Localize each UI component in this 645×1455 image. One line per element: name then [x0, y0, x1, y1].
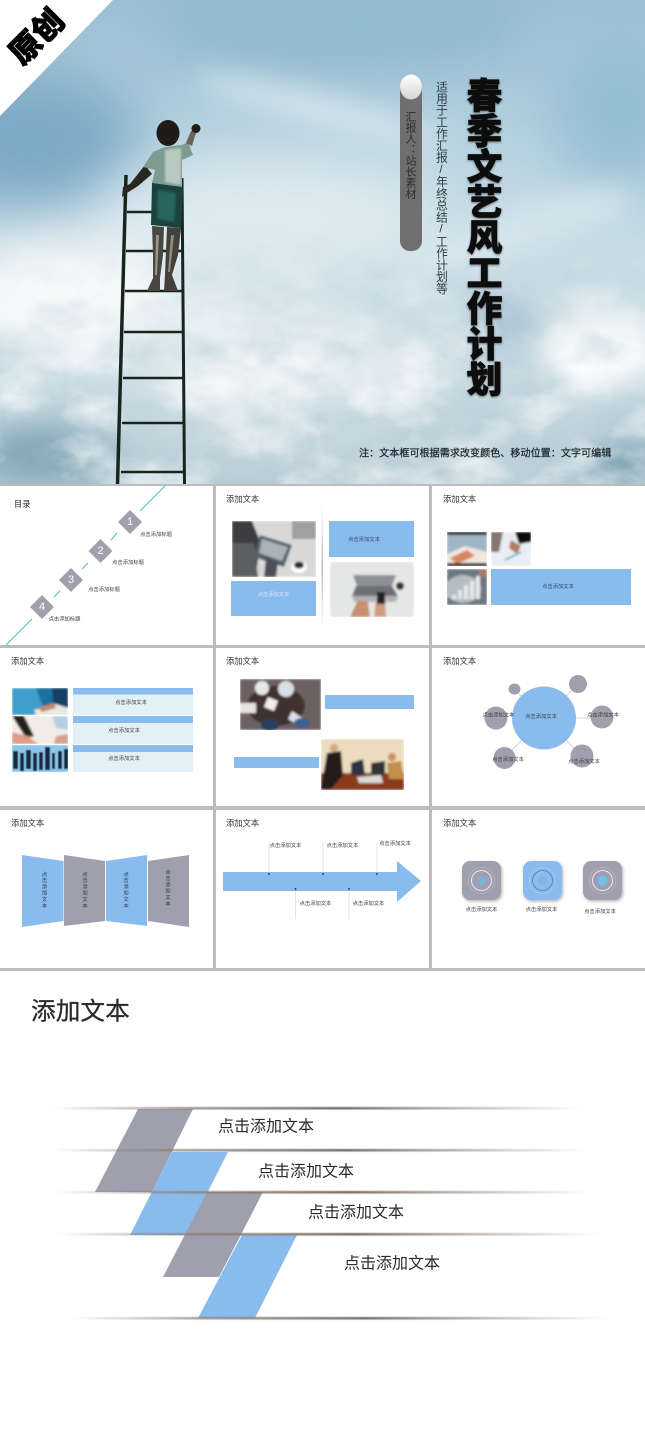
note: 注：文本框可根据需求改变颜色、移动位置：文字可编辑	[359, 446, 611, 460]
hub labels: 点击添加文本	[587, 710, 620, 718]
item 1: 点击添加标题	[140, 530, 173, 538]
photo: laptop and hands	[330, 562, 414, 617]
slide: contents	[0, 486, 213, 645]
heading: 添加文本	[226, 656, 259, 666]
rule lines	[49, 1107, 608, 1320]
ladder	[118, 175, 184, 484]
slide: photo grid	[432, 486, 645, 645]
fold 1: 点击添加文本	[40, 871, 47, 909]
photo: silhouettes	[12, 745, 68, 772]
item 1: 1	[127, 516, 133, 528]
slide: three rows	[0, 648, 213, 806]
photo: tablet on table	[232, 521, 316, 577]
item 3: 点击添加标题	[88, 585, 121, 593]
slide: two columns	[216, 486, 429, 645]
labels: 点击添加文本	[308, 1204, 404, 1222]
fold 4: 点击添加文本	[164, 869, 171, 907]
subtitle: 适用于工作汇报/年终总结/工作计划等	[434, 81, 448, 294]
item 1	[118, 510, 173, 538]
photo: hands and papers	[447, 532, 487, 566]
timeline labels: 点击添加文本	[300, 899, 332, 907]
row 2: 点击添加文本	[108, 726, 141, 734]
icon 3	[583, 861, 622, 900]
fold 4	[148, 855, 189, 927]
hub labels: 点击添加文本	[568, 757, 601, 765]
labels: 点击添加文本	[344, 1254, 440, 1272]
row 1	[73, 688, 193, 715]
icon 2 label: 点击添加文本	[526, 905, 558, 913]
fold 3: 点击添加文本	[122, 871, 129, 909]
blue box: 点击添加文本	[542, 582, 575, 590]
labels	[218, 1118, 440, 1272]
heading: 目录	[14, 499, 31, 509]
blue box right	[329, 521, 414, 557]
heading: 添加文本	[31, 998, 130, 1026]
blue box left: 点击添加文本	[258, 590, 290, 598]
heading: 添加文本	[11, 818, 44, 828]
dashed diagonal line	[6, 486, 165, 645]
photo: signing blue	[12, 688, 68, 715]
blue bar upper	[325, 695, 414, 709]
hero panel: sky with boy on ladder	[0, 0, 645, 495]
photo: pen and hands	[12, 716, 68, 744]
timeline labels: 点击添加文本	[379, 839, 412, 847]
hub labels: 点击添加文本	[525, 712, 558, 720]
labels: 点击添加文本	[258, 1162, 354, 1180]
timeline labels: 点击添加文本	[270, 841, 302, 849]
hub labels	[483, 710, 620, 765]
labels: 点击添加文本	[218, 1118, 314, 1136]
hub labels: 点击添加文本	[492, 755, 525, 763]
item 2: 点击添加标题	[112, 558, 145, 566]
bottom slide	[0, 971, 645, 1455]
timeline labels: 点击添加文本	[353, 899, 385, 907]
heading: 添加文本	[443, 656, 476, 666]
item 4: 点击添加标题	[49, 614, 81, 622]
item 2	[88, 539, 145, 566]
blue box left	[231, 581, 316, 616]
heading: 添加文本	[226, 818, 259, 828]
dots	[268, 873, 378, 890]
blue box right: 点击添加文本	[348, 535, 381, 543]
item 3: 3	[68, 574, 74, 586]
heading: 添加文本	[443, 494, 476, 504]
satellite nodes	[484, 675, 614, 769]
fold 1	[22, 855, 64, 927]
heading: 添加文本	[443, 818, 476, 828]
slide: folded panels	[0, 810, 213, 968]
photo: meeting from above	[240, 679, 321, 730]
corner ribbon	[0, 0, 113, 116]
leader lines	[269, 842, 377, 919]
row 1: 点击添加文本	[115, 698, 148, 706]
photo: team in office	[321, 739, 404, 790]
presenter pill	[400, 74, 422, 251]
icon 1 label: 点击添加文本	[466, 905, 498, 913]
photo: writing chart	[491, 532, 531, 566]
item 4: 4	[39, 601, 45, 613]
timeline labels: 点击添加文本	[327, 841, 359, 849]
item 4	[30, 595, 81, 622]
slide: three icons	[432, 810, 645, 968]
icon 1	[462, 861, 501, 900]
hub labels: 点击添加文本	[483, 710, 515, 718]
title: 春季文艺风工作计划	[462, 77, 502, 396]
fold 2: 点击添加文本	[81, 871, 88, 909]
timeline labels	[270, 839, 412, 907]
row 2	[73, 716, 193, 744]
item 2: 2	[97, 545, 104, 557]
sky background	[0, 0, 645, 495]
photo: bar chart	[447, 569, 487, 605]
row 3: 点击添加文本	[108, 754, 141, 762]
blue bar lower	[234, 757, 319, 768]
icon 2	[523, 861, 562, 900]
blue box	[491, 569, 631, 605]
boy	[122, 120, 200, 291]
stair shapes	[95, 1109, 297, 1318]
divider	[322, 505, 323, 630]
heading: 添加文本	[11, 656, 44, 666]
heading: 添加文本	[226, 494, 259, 504]
row 3	[73, 745, 193, 772]
item 3	[59, 568, 121, 593]
hub	[512, 686, 576, 750]
fold 3	[106, 855, 147, 926]
slide: staggered photos	[216, 648, 429, 806]
connectors	[504, 684, 602, 758]
presenter text: 汇报人：站长素材	[404, 111, 416, 199]
arrow	[223, 861, 421, 902]
slide: arrow timeline	[216, 810, 429, 968]
slide: hub diagram	[432, 648, 645, 806]
slide grid backdrop	[0, 484, 645, 971]
fold 2	[64, 855, 105, 926]
ribbon text: 原创	[3, 3, 71, 71]
icon 3 label: 点击添加文本	[584, 907, 617, 915]
